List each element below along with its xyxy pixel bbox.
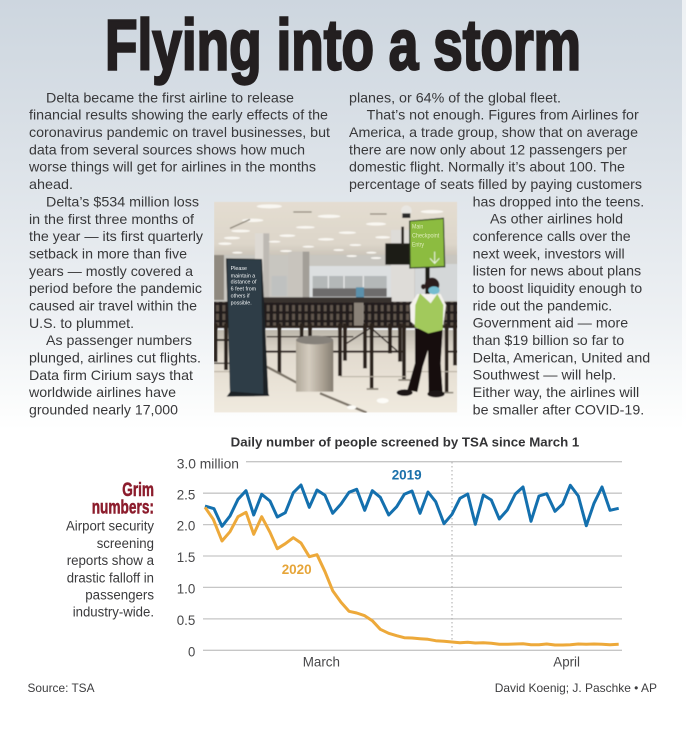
text block: left column beside photo: years — mostly covered a bbox=[29, 264, 193, 279]
text block: right column beside photo: Delta, American, United and bbox=[473, 350, 650, 365]
green checkpoint sign text: Checkpoint bbox=[412, 233, 440, 239]
label: 2019: 2019 bbox=[392, 467, 422, 482]
text block: right column top: America, a trade group, show that on average bbox=[349, 125, 638, 140]
green checkpoint sign text: Main bbox=[412, 225, 423, 231]
text block: left column beside photo: As passenger numbers bbox=[46, 333, 192, 348]
label: 2020: 2020 bbox=[282, 562, 312, 577]
sidebar heading: Grim bbox=[122, 480, 154, 501]
sidebar text: screening bbox=[97, 536, 154, 551]
text block: left column top: ahead. bbox=[29, 177, 73, 192]
text block: right column beside photo: conference calls over the bbox=[473, 229, 631, 244]
text block: right column top: percentage of seats filled by paying customers bbox=[349, 177, 642, 192]
text block: left column top: data from several sources shows how much bbox=[29, 142, 305, 157]
text block: left column beside photo bbox=[28, 194, 203, 418]
text block: right column beside photo bbox=[473, 194, 650, 417]
text block: right column beside photo: Government aid — more bbox=[473, 316, 628, 331]
text block: left column beside photo: U.S. to plummet. bbox=[29, 316, 134, 331]
text block: right column beside photo: be smaller after COVID-19. bbox=[473, 402, 644, 417]
y-axis labels: 2.5 bbox=[177, 486, 195, 502]
y-axis labels: 1.0 bbox=[177, 580, 195, 596]
chart: daily TSA screenings bbox=[177, 435, 622, 670]
y-axis labels: 1.5 bbox=[177, 549, 195, 565]
text block: right column top: That’s not enough. Figures from Airlines for bbox=[367, 108, 639, 123]
sidebar text: reports show a bbox=[67, 553, 155, 568]
text block: left column beside photo: Delta’s $534 million loss bbox=[46, 194, 199, 210]
x-axis labels: March bbox=[303, 654, 340, 670]
sidebar text: industry-wide. bbox=[73, 605, 154, 620]
text block: right column top: there are now only about 12 passengers per bbox=[349, 142, 627, 157]
background gradient panel bbox=[0, 0, 686, 430]
text block: left column beside photo: Data firm Cirium says that bbox=[29, 368, 193, 383]
y-axis labels: 3.0 million bbox=[177, 456, 239, 472]
green checkpoint sign text bbox=[412, 225, 440, 248]
text block: right column beside photo: Either way, the airlines will bbox=[473, 385, 639, 400]
text block: right column beside photo: listen for news about plans bbox=[473, 264, 641, 279]
text block: left column top: coronavirus pandemic on travel businesses, but bbox=[29, 125, 330, 140]
sidebar text: Airport security bbox=[66, 519, 154, 534]
sidebar: grim numbers bbox=[66, 480, 155, 620]
sidebar text: passengers bbox=[85, 588, 154, 602]
text block: right column beside photo: to boost liquidity enough to bbox=[473, 281, 642, 296]
text block: left column top: financial results showing the early effects of the bbox=[29, 108, 328, 123]
y-axis labels: 0.5 bbox=[177, 612, 195, 628]
text block: right column beside photo: has dropped into the teens. bbox=[473, 194, 644, 209]
text block: right column top bbox=[349, 90, 642, 192]
sidebar heading bbox=[92, 480, 154, 518]
line: 2020 bbox=[205, 507, 619, 645]
photo sign text: others if bbox=[231, 293, 250, 299]
text block: right column top: planes, or 64% of the global fleet. bbox=[349, 90, 561, 105]
sidebar heading: numbers: bbox=[92, 497, 154, 518]
text block: left column beside photo: grounded nearly 17,000 bbox=[29, 402, 178, 418]
photo sign text: Please bbox=[231, 266, 247, 272]
sidebar text bbox=[66, 519, 155, 620]
y-axis labels: 0 bbox=[188, 644, 195, 660]
text block: left column beside photo: setback in more than five bbox=[29, 246, 187, 262]
text block: left column beside photo: plunged, airlines cut flights. bbox=[29, 350, 201, 366]
photo sign text: distance of bbox=[231, 280, 257, 286]
photo sign text: 6 feet from bbox=[231, 287, 257, 293]
photo sign text: possible. bbox=[231, 300, 252, 306]
text block: left column top: Delta became the first airline to release bbox=[46, 90, 294, 105]
text block: left column top: worse things will get for airlines in the months bbox=[28, 160, 316, 175]
text block: right column top: domestic flight. Normally it’s about 100. The bbox=[349, 160, 625, 175]
x-axis labels bbox=[303, 654, 580, 670]
text block: left column beside photo: caused air travel within the bbox=[29, 298, 197, 314]
text block: right column beside photo: next week, investors will bbox=[473, 246, 625, 261]
source credit: Source: TSA bbox=[28, 681, 94, 695]
text block: left column beside photo: period before the pandemic bbox=[29, 281, 202, 296]
y-axis labels bbox=[177, 456, 239, 660]
text block: left column beside photo: the year — its first quarterly bbox=[29, 229, 203, 244]
y-axis labels: 2.0 bbox=[177, 518, 195, 534]
sidebar text: drastic falloff in bbox=[67, 570, 154, 585]
byline credit: David Koenig; J. Paschke • AP bbox=[495, 681, 657, 695]
photo: airport security checkpoint bbox=[214, 202, 457, 413]
text block: right column beside photo: ride out the pandemic. bbox=[473, 298, 612, 313]
text block: right column beside photo: Southwest — will help. bbox=[473, 368, 616, 383]
photo sign text: maintain a bbox=[231, 273, 255, 279]
x-axis labels: April bbox=[553, 654, 580, 670]
chart title: Daily number of people screened by TSA since March 1 bbox=[231, 435, 579, 450]
photo sign text bbox=[231, 266, 257, 306]
line: 2019 bbox=[205, 485, 619, 526]
green checkpoint sign text: Entry bbox=[412, 242, 424, 248]
text block: left column beside photo: worldwide airlines have bbox=[28, 385, 176, 400]
text block: right column beside photo: than $19 billion so far to bbox=[473, 333, 624, 348]
text block: right column beside photo: As other airlines hold bbox=[490, 212, 623, 227]
text block: left column beside photo: in the first three months of bbox=[29, 212, 194, 227]
text block: left column top bbox=[28, 90, 330, 192]
